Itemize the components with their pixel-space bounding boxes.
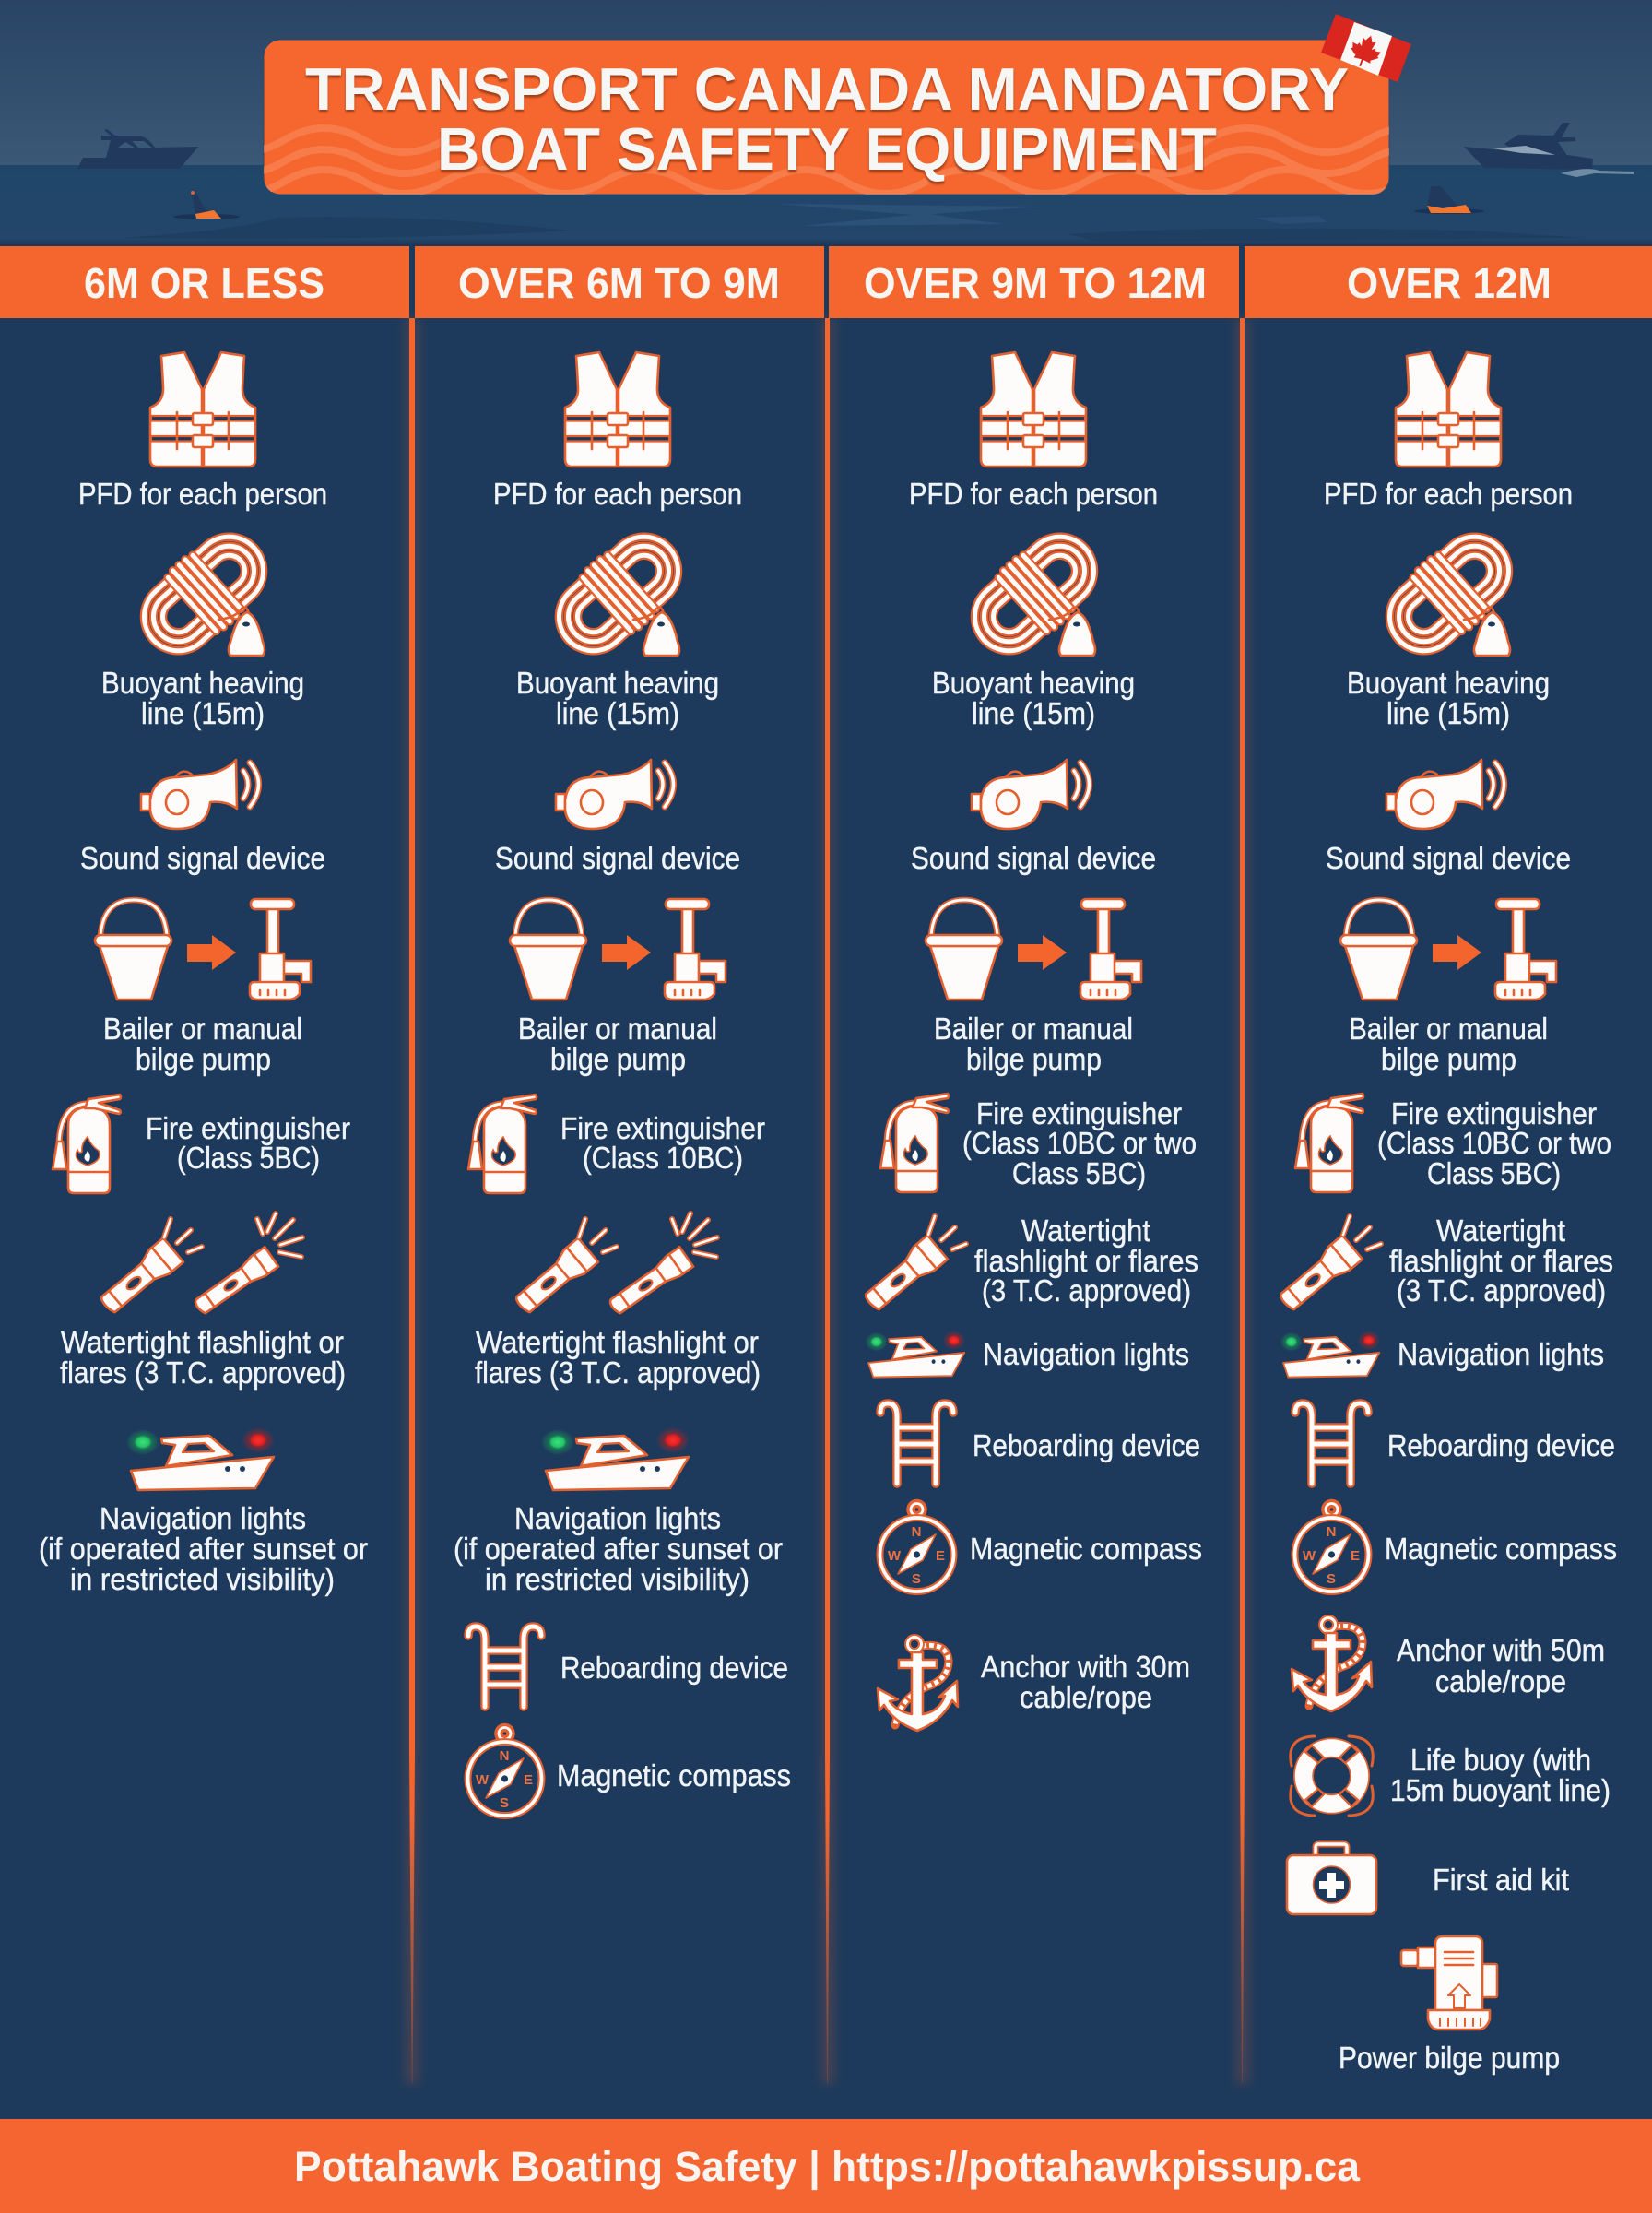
item: flashlight or flares: flashlight or flares [1389, 1245, 1613, 1279]
item: buoyant heaving line: Buoyant heaving [101, 667, 304, 701]
item: navigation lights: Navigation lights [983, 1338, 1189, 1372]
item: magnetic compass: N [500, 1748, 509, 1764]
item: magnetic compass: W [1303, 1548, 1316, 1564]
item: navigation lights: Navigation lights [514, 1502, 721, 1536]
column header: 6m or less [0, 246, 409, 318]
item: bailer or pump: bilge pump [966, 1043, 1102, 1077]
column header: over 12m [1245, 246, 1652, 318]
item: navigation lights [39, 1427, 368, 1597]
item: buoyant heaving line [932, 520, 1135, 731]
item: fire extinguisher: Fire extinguisher [1391, 1097, 1597, 1131]
item: sound signal device [911, 760, 1156, 876]
item: flashlight or flares [860, 1214, 1198, 1316]
title text: TRANSPORT CANADA MANDATORY [305, 55, 1349, 123]
icon: marker buoy left [173, 191, 240, 219]
footer [0, 2119, 1652, 2213]
item: power bilge pump: Power bilge pump [1339, 2041, 1560, 2076]
item: buoyant heaving line [101, 520, 304, 731]
item: bailer or pump [926, 899, 1141, 1077]
item: bailer or pump: Bailer or manual [518, 1012, 717, 1047]
item: magnetic compass: Magnetic compass [970, 1533, 1202, 1567]
item: bailer or pump [95, 899, 311, 1077]
column header: over 9m to 12m: OVER 9M TO 12M [864, 259, 1207, 307]
item: navigation lights: Navigation lights [100, 1502, 306, 1536]
panel: title banner [264, 41, 1390, 195]
item: sound signal device: Sound signal device [80, 842, 325, 876]
item: PFD [493, 352, 742, 512]
item: flashlight or flares: flares (3 T.C. approved) [60, 1356, 346, 1391]
item: anchor [1292, 1617, 1605, 1711]
column header: over 12m: OVER 12M [1347, 259, 1552, 307]
item: sound signal device: Sound signal device [495, 842, 740, 876]
item: sound signal device [80, 760, 325, 876]
item: magnetic compass: S [500, 1795, 509, 1811]
item: reboarding device [880, 1403, 1200, 1484]
item: buoyant heaving line [516, 520, 719, 731]
item: navigation lights [454, 1427, 783, 1597]
icon: distant boat left [77, 129, 198, 169]
item: magnetic compass: E [1351, 1548, 1360, 1564]
item: sound signal device: Sound signal device [911, 842, 1156, 876]
item: life buoy [1291, 1736, 1611, 1816]
item: navigation lights: (if operated after sunset or [454, 1533, 783, 1567]
item: magnetic compass: W [888, 1548, 902, 1564]
item: PFD: PFD for each person [78, 478, 327, 512]
item: bailer or pump: Bailer or manual [103, 1012, 302, 1047]
item: magnetic compass: S [1327, 1571, 1336, 1587]
item: flashlight or flares: flares (3 T.C. approved) [475, 1356, 761, 1391]
panel: over 9m to 12m [829, 246, 1239, 1731]
item: magnetic compass [1294, 1503, 1617, 1592]
item: flashlight or flares: flashlight or flares [974, 1245, 1198, 1279]
item: sound signal device [1326, 760, 1571, 876]
item: magnetic compass [879, 1503, 1202, 1592]
item: buoyant heaving line: Buoyant heaving [516, 667, 719, 701]
item: flashlight or flares: Watertight flashlight or [61, 1326, 344, 1360]
item: bailer or pump: bilge pump [136, 1043, 271, 1077]
item: buoyant heaving line: Buoyant heaving [1347, 667, 1550, 701]
item: anchor: Anchor with 50m [1397, 1634, 1605, 1668]
item: fire extinguisher [468, 1095, 765, 1193]
item: buoyant heaving line: line (15m) [972, 697, 1095, 731]
title text: BOAT SAFETY EQUIPMENT [437, 115, 1217, 183]
item: fire extinguisher: Fire extinguisher [560, 1112, 765, 1146]
item: power bilge pump [1339, 1936, 1560, 2076]
item: flashlight or flares: (3 T.C. approved) [1397, 1274, 1606, 1308]
panel: harbour scene background [0, 0, 1652, 246]
item: fire extinguisher: (Class 10BC or two [962, 1127, 1197, 1161]
item: magnetic compass: N [1327, 1524, 1336, 1540]
item: buoyant heaving line: line (15m) [556, 697, 679, 731]
panel: 6m or less [0, 246, 409, 1597]
item: fire extinguisher: Fire extinguisher [146, 1112, 350, 1146]
item: flashlight or flares [60, 1213, 346, 1391]
panel: over 6m to 9m [415, 246, 824, 1816]
icon: distant yacht right [1464, 123, 1634, 177]
item: flashlight or flares: (3 T.C. approved) [982, 1274, 1191, 1308]
item: bailer or pump: Bailer or manual [934, 1012, 1133, 1047]
item: magnetic compass: Magnetic compass [1385, 1533, 1617, 1567]
icon: marker buoy right [1414, 186, 1484, 214]
item: reboarding device: Reboarding device [560, 1651, 788, 1686]
item: bailer or pump: bilge pump [1381, 1043, 1516, 1077]
item: buoyant heaving line [1347, 520, 1550, 731]
item: PFD [78, 352, 327, 512]
item: magnetic compass: S [912, 1571, 921, 1587]
item: first aid kit: First aid kit [1433, 1864, 1570, 1898]
item: flashlight or flares: Watertight [1436, 1214, 1566, 1249]
item: navigation lights: in restricted visibility) [485, 1563, 749, 1597]
item: anchor [878, 1638, 1190, 1731]
column header: over 6m to 9m [415, 246, 824, 318]
column header: over 6m to 9m: OVER 6M TO 9M [458, 259, 780, 307]
item: PFD: PFD for each person [493, 478, 742, 512]
column dividers [406, 318, 1249, 2084]
item: flashlight or flares: Watertight [1021, 1214, 1151, 1249]
item: flashlight or flares [1275, 1214, 1613, 1316]
item: bailer or pump [510, 899, 726, 1077]
item: fire extinguisher: Fire extinguisher [976, 1097, 1182, 1131]
item: navigation lights: in restricted visibility) [70, 1563, 335, 1597]
item: magnetic compass: N [912, 1524, 921, 1540]
item: magnetic compass: E [524, 1772, 533, 1788]
item: reboarding device [1295, 1403, 1615, 1484]
item: fire extinguisher [1295, 1094, 1611, 1192]
item: reboarding device [468, 1627, 788, 1707]
panel: over 12m [1245, 246, 1652, 2076]
item: sound signal device [495, 760, 740, 876]
item: PFD [1324, 352, 1573, 512]
item: fire extinguisher: (Class 5BC) [177, 1142, 320, 1176]
item: bailer or pump: bilge pump [550, 1043, 686, 1077]
item: bailer or pump: Bailer or manual [1349, 1012, 1548, 1047]
item: anchor: cable/rope [1020, 1681, 1152, 1715]
item: magnetic compass: Magnetic compass [557, 1759, 791, 1793]
item: reboarding device: Reboarding device [1387, 1429, 1615, 1463]
column header: over 9m to 12m [829, 246, 1239, 318]
footer: Pottahawk Boating Safety | https://pottahawkpissup.ca [294, 2143, 1361, 2191]
item: magnetic compass: E [936, 1548, 945, 1564]
item: PFD [909, 352, 1158, 512]
item: bailer or pump [1340, 899, 1556, 1077]
item: magnetic compass: W [476, 1772, 490, 1788]
item: fire extinguisher: Class 5BC) [1427, 1157, 1561, 1191]
item: PFD: PFD for each person [909, 478, 1158, 512]
item: anchor: Anchor with 30m [981, 1651, 1190, 1685]
item: fire extinguisher: (Class 10BC) [583, 1142, 743, 1176]
item: fire extinguisher: Class 5BC) [1012, 1157, 1146, 1191]
item: first aid kit [1287, 1844, 1570, 1914]
item: buoyant heaving line: line (15m) [1386, 697, 1510, 731]
icon: Canadian flag [1321, 14, 1411, 82]
item: anchor: cable/rope [1435, 1665, 1566, 1699]
item: reboarding device: Reboarding device [973, 1429, 1200, 1463]
item: fire extinguisher [880, 1094, 1197, 1192]
item: PFD: PFD for each person [1324, 478, 1573, 512]
item: buoyant heaving line: Buoyant heaving [932, 667, 1135, 701]
item: magnetic compass [468, 1728, 791, 1816]
column header: 6m or less: 6M OR LESS [84, 259, 324, 307]
item: fire extinguisher [53, 1095, 350, 1193]
item: navigation lights [1280, 1331, 1604, 1378]
item: sound signal device: Sound signal device [1326, 842, 1571, 876]
item: flashlight or flares [475, 1213, 761, 1391]
item: life buoy: Life buoy (with [1410, 1744, 1591, 1778]
item: navigation lights [866, 1331, 1189, 1378]
title text [305, 55, 1349, 183]
item: navigation lights: (if operated after sunset or [39, 1533, 368, 1567]
item: fire extinguisher: (Class 10BC or two [1377, 1127, 1611, 1161]
item: navigation lights: Navigation lights [1398, 1338, 1604, 1372]
item: buoyant heaving line: line (15m) [141, 697, 265, 731]
item: flashlight or flares: Watertight flashlight or [476, 1326, 759, 1360]
item: life buoy: 15m buoyant line) [1390, 1774, 1611, 1808]
